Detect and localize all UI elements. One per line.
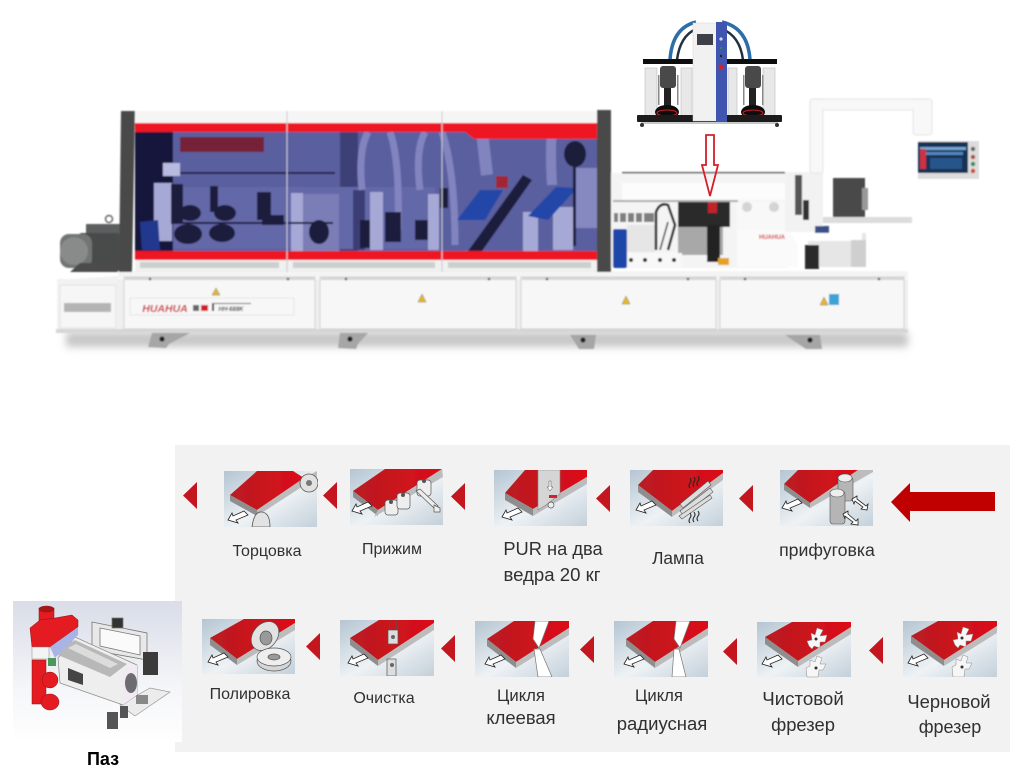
brand plate: HH-688K <box>218 307 244 313</box>
icon: glue scraper <box>475 621 569 677</box>
label: Прижим: Прижим <box>362 541 422 558</box>
red motor body <box>32 660 59 710</box>
label: Лампа: Лампа <box>652 548 704 568</box>
icon: finishing cutter <box>757 622 851 677</box>
machine: edge banding machine <box>56 99 979 349</box>
brand plate: HUAHUA <box>142 303 188 315</box>
central cabinet <box>693 22 727 122</box>
end trim assembly <box>785 172 912 269</box>
lower valves <box>107 695 148 729</box>
blue coolant jug <box>613 229 627 268</box>
icon: PUR glue application <box>494 470 587 526</box>
icon: cleaning <box>340 620 434 676</box>
machine dark end posts <box>119 110 611 272</box>
step arrow <box>580 636 594 663</box>
image: groove unit <box>13 601 182 742</box>
label: PUR: PUR на два <box>503 538 604 559</box>
step arrow <box>451 483 465 510</box>
machine floor shadow <box>66 332 908 347</box>
icon: polishing <box>202 616 295 674</box>
icon: rough cutter <box>903 621 997 677</box>
label: Цикля радиусная: Цикля <box>635 686 683 705</box>
blue hoses <box>670 22 750 60</box>
white cover with brand: HUAHUA <box>759 235 786 241</box>
icon: radius scraper <box>614 621 708 677</box>
main white housing <box>58 637 137 705</box>
icon: pre-milling <box>780 470 873 526</box>
label: Черновой фрезер: фрезер <box>919 717 981 737</box>
label: Цикля клеевая: клеевая <box>486 707 556 728</box>
window separators <box>286 111 442 272</box>
label: Черновой фрезер: Черновой <box>907 691 991 712</box>
step arrow <box>306 633 320 660</box>
blue service icon <box>829 294 839 305</box>
label: Черновой фрезер <box>907 691 991 737</box>
white knob block <box>627 253 682 267</box>
right pump <box>741 66 765 119</box>
glue melter unit: PUR <box>637 22 782 127</box>
motor <box>60 216 120 272</box>
base plate <box>120 688 170 716</box>
dark tool units <box>171 175 532 251</box>
label: прифуговка: прифуговка <box>779 540 875 560</box>
base drawer panels <box>124 277 904 329</box>
white cover with brand <box>737 230 798 267</box>
rail <box>180 172 335 174</box>
blue hood glass <box>50 627 78 658</box>
label: Цикля клеевая: Цикля <box>497 686 545 705</box>
step arrow <box>596 485 610 512</box>
step arrow <box>739 485 753 512</box>
label: PUR <box>503 538 604 585</box>
step arrow <box>183 482 197 509</box>
white glue cylinders <box>645 68 775 116</box>
label: Цикля радиусная <box>617 686 707 734</box>
label: Цикля клеевая <box>486 686 556 728</box>
label: Чистовой фрезер <box>762 688 844 735</box>
yellow control box <box>718 258 729 265</box>
label: Торцовка: Торцовка <box>233 543 302 560</box>
touch control panel <box>918 141 979 179</box>
icon: heating lamp <box>630 470 723 526</box>
big red flow arrow <box>891 483 995 522</box>
machine base <box>56 271 908 333</box>
red arrow: glue unit to machine <box>702 135 718 196</box>
dark rear motor <box>143 652 158 675</box>
white mounting plates <box>154 183 573 251</box>
label: PUR: ведра 20 кг <box>503 564 601 585</box>
label: Паз: Паз <box>87 749 119 769</box>
left pump <box>655 66 679 119</box>
machine enclosure: red and blue window section <box>135 111 597 272</box>
overhead white pipe arm <box>810 99 932 173</box>
brand plate <box>130 298 294 315</box>
pistons and cables <box>614 204 675 252</box>
step arrow <box>723 638 737 665</box>
machine open tool section <box>611 172 912 269</box>
step arrow <box>323 482 337 509</box>
icon: pressure rollers <box>350 469 443 525</box>
label: Цикля радиусная: радиусная <box>617 713 707 734</box>
black crossbar <box>643 59 777 64</box>
trolley platform <box>637 115 782 127</box>
label: Очистка: Очистка <box>353 690 415 707</box>
label: Чистовой фрезер: Чистовой <box>762 688 844 709</box>
icon: end trimming <box>224 471 318 527</box>
panel: process steps <box>175 445 1010 752</box>
hoses <box>361 132 552 245</box>
machine feet <box>148 333 822 349</box>
rear frame <box>92 618 147 660</box>
warning icons <box>212 288 828 305</box>
small black motor block <box>68 668 83 685</box>
lower vents <box>140 262 591 268</box>
red dust hood <box>30 606 78 647</box>
label: Чистовой фрезер: фрезер <box>771 714 835 735</box>
step arrow <box>869 637 883 664</box>
label: Полировка: Полировка <box>210 686 291 703</box>
step arrow <box>441 635 455 662</box>
